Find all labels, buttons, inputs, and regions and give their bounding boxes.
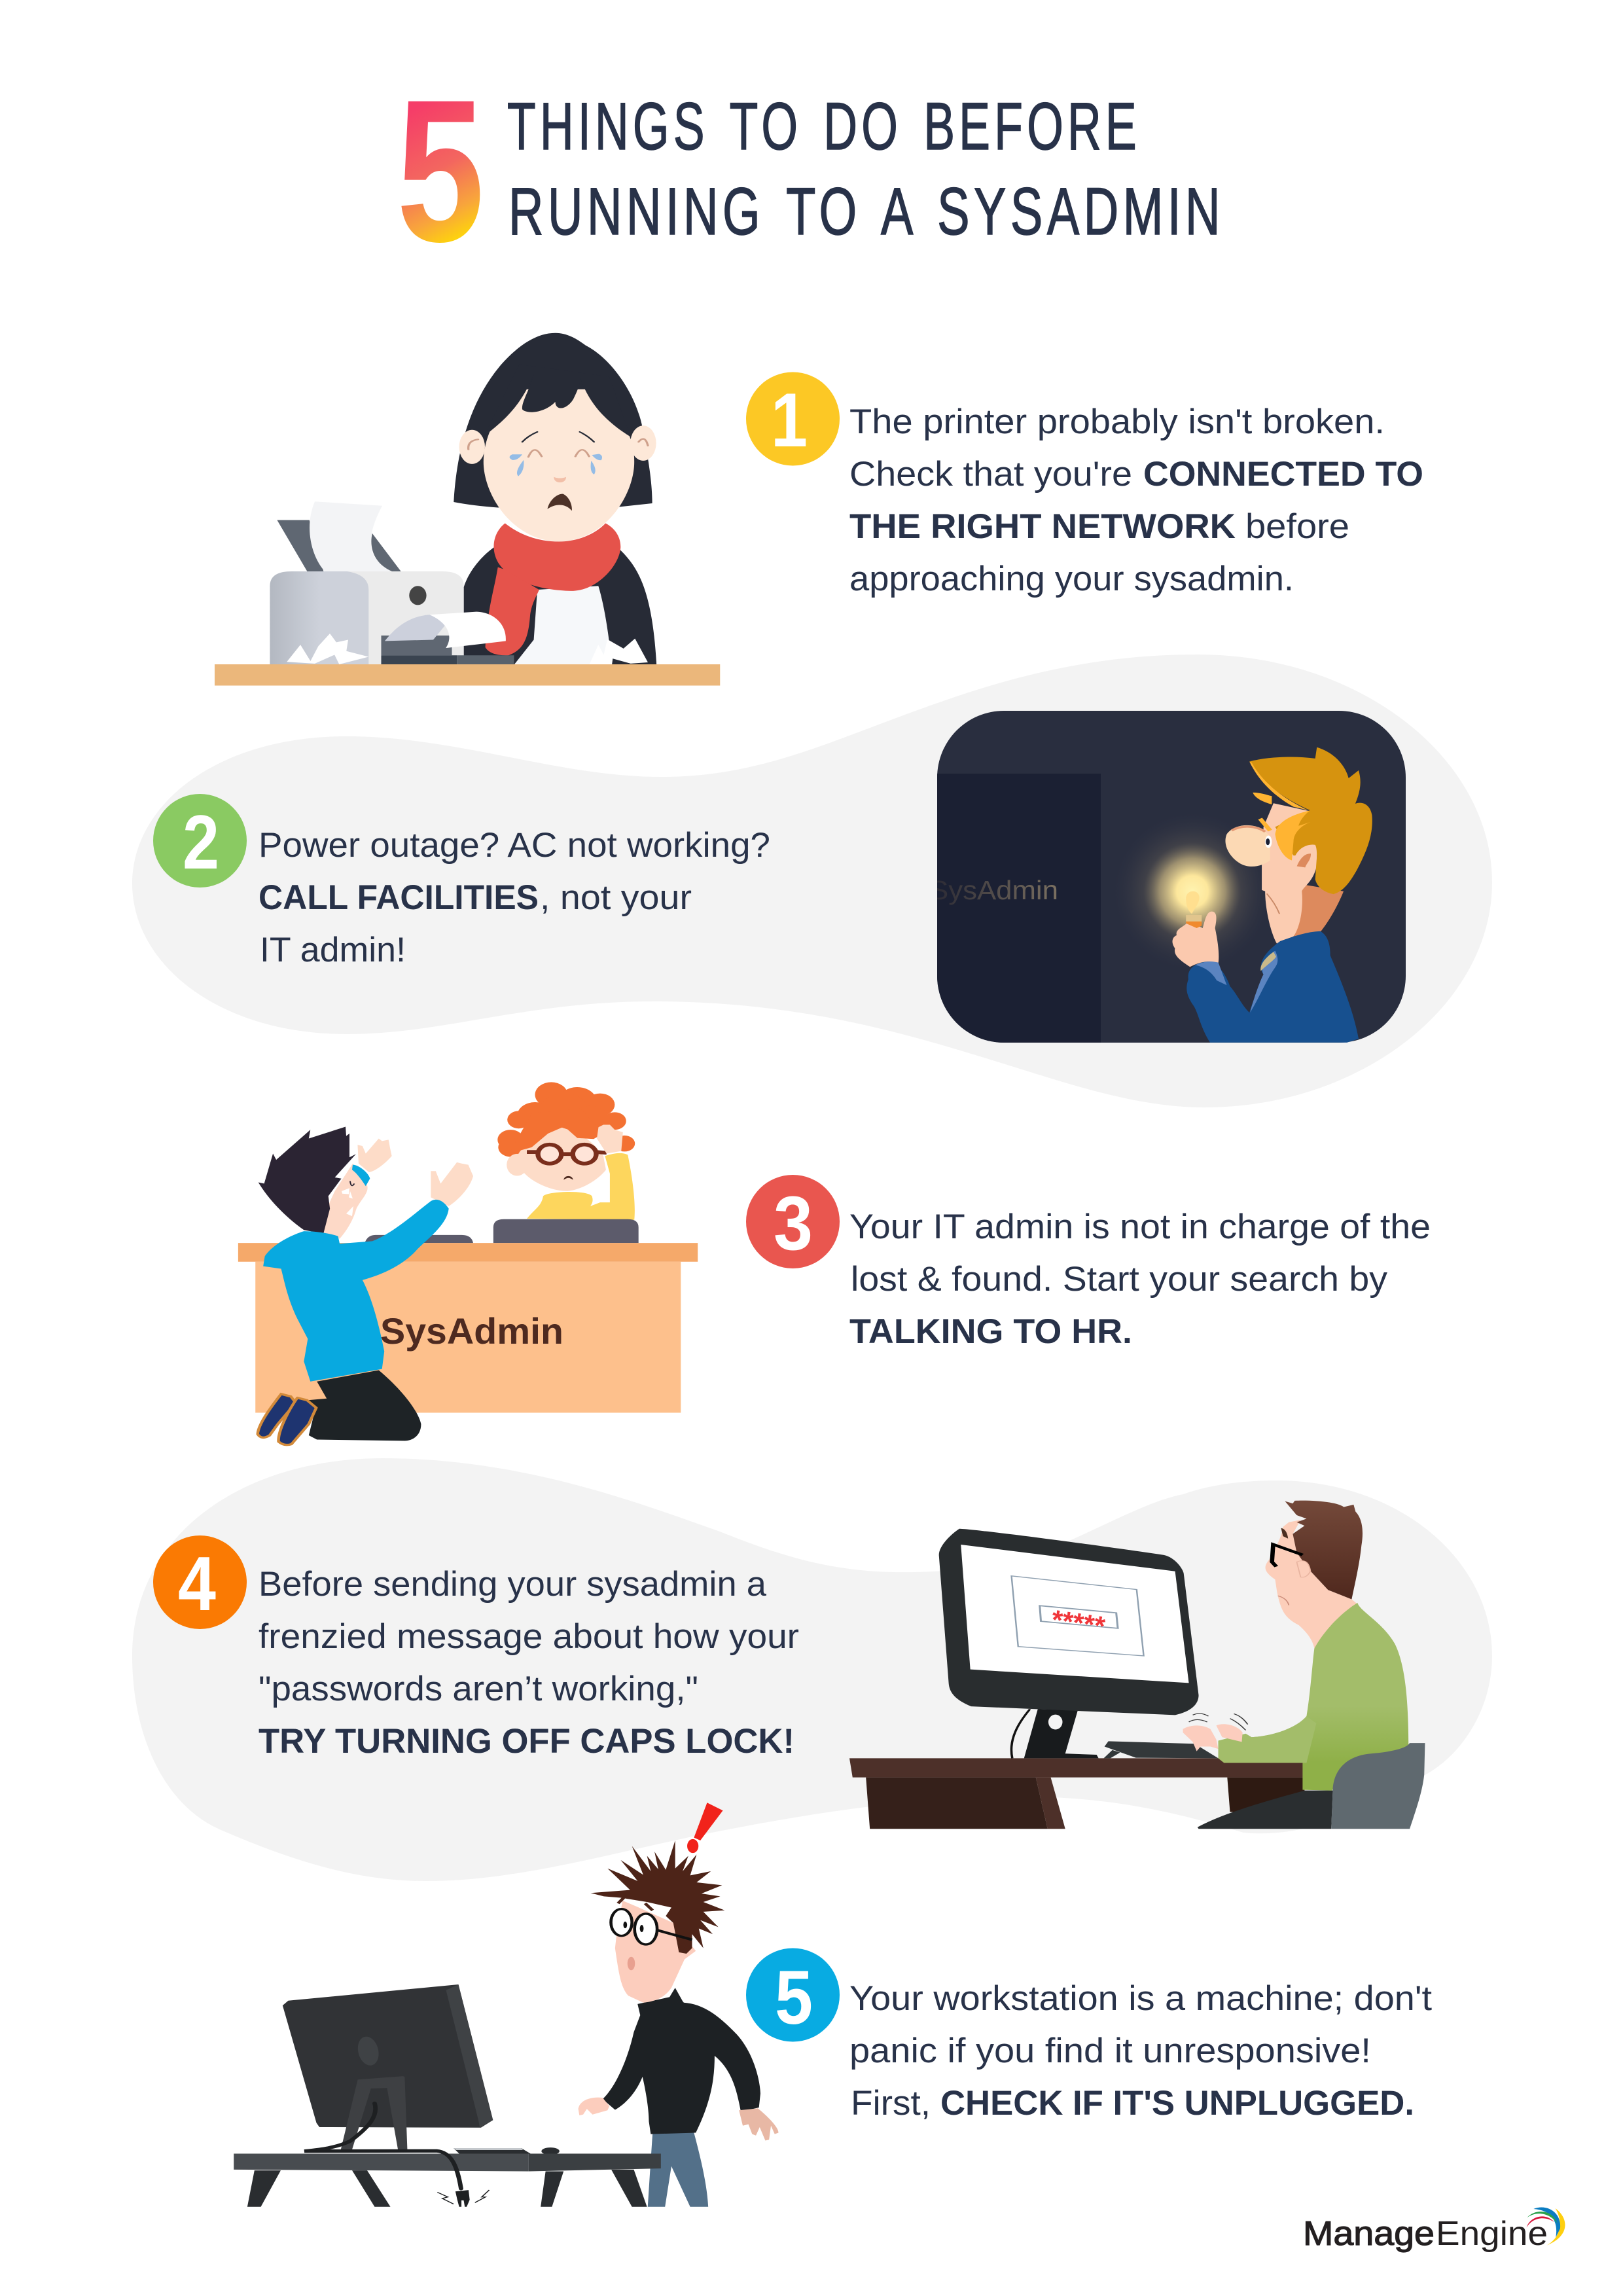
power cable xyxy=(304,2104,461,2189)
ear xyxy=(315,1191,329,1209)
ManageEngine logo xyxy=(1303,2208,1565,2253)
woman body xyxy=(464,547,656,665)
printer slot xyxy=(381,636,452,655)
hair highlights xyxy=(1249,762,1313,860)
printer tray xyxy=(277,520,401,572)
nose and mouth xyxy=(554,477,566,482)
redhead ear xyxy=(507,1154,527,1176)
title numeral 5: 5 xyxy=(397,57,484,284)
redhead sweater xyxy=(527,1153,635,1220)
kneeling man hair xyxy=(259,1127,356,1234)
step 5 text: panic if you find it unresponsive! xyxy=(849,2032,1371,2070)
ear xyxy=(1296,1561,1310,1577)
mouse xyxy=(541,2147,560,2155)
tears xyxy=(510,454,602,476)
left hand xyxy=(579,2098,609,2115)
printer base right xyxy=(457,655,514,665)
step 5 text: First, xyxy=(851,2084,931,2123)
hair xyxy=(1285,1501,1363,1600)
password asterisks: ***** xyxy=(1050,1604,1107,1641)
step 1 text: The printer probably isn't broken. xyxy=(849,403,1385,441)
step 2 badge xyxy=(153,794,247,888)
step 2 text: Power outage? AC not working? xyxy=(259,826,770,865)
table left panel xyxy=(866,1778,1048,1829)
scarf tail xyxy=(486,567,539,655)
table top left xyxy=(234,2154,529,2171)
step 3 badge: 3 xyxy=(774,1180,813,1266)
pupils xyxy=(623,1922,643,1932)
step 4 text: frenzied message about how your xyxy=(259,1617,799,1656)
closed eyes and brows xyxy=(469,432,648,457)
step 2 text: IT admin! xyxy=(260,931,406,969)
step 3 badge xyxy=(746,1175,840,1268)
crumpled paper right xyxy=(590,639,648,664)
hair xyxy=(1249,747,1372,894)
step 5 badge xyxy=(746,1948,840,2042)
exclamation dot xyxy=(687,1839,698,1853)
ear xyxy=(1294,845,1317,886)
lighter top xyxy=(1186,915,1202,922)
sparks xyxy=(437,2190,490,2204)
glasses xyxy=(527,1145,607,1164)
jammed paper inner xyxy=(385,615,448,641)
step 4 badge xyxy=(153,1535,247,1629)
step 2 badge: 2 xyxy=(183,799,219,885)
title xyxy=(397,57,1224,284)
keyboard foot xyxy=(1103,1750,1120,1758)
step 4 text: TRY TURNING OFF CAPS LOCK! xyxy=(259,1722,794,1761)
sweater xyxy=(603,1988,760,2134)
mouth xyxy=(628,1957,635,1970)
title line 2: RUNNING TO A SYSADMIN xyxy=(508,174,1224,249)
glasses xyxy=(1272,1545,1302,1567)
eyebrow xyxy=(1260,819,1270,831)
lighter xyxy=(1186,921,1202,928)
desk xyxy=(215,664,720,686)
hands xyxy=(1183,1724,1243,1751)
sweater xyxy=(1219,1603,1408,1791)
mouth xyxy=(547,494,572,511)
desk top xyxy=(238,1243,698,1262)
mouth crease xyxy=(1267,893,1279,914)
mouth xyxy=(1278,1596,1289,1605)
scarf xyxy=(493,524,620,591)
illustration: kneeling man at sysadmin desk xyxy=(238,1082,698,1445)
pants xyxy=(1198,1791,1333,1829)
redhead mouth xyxy=(563,1176,573,1180)
printer base xyxy=(381,655,457,665)
bangs xyxy=(484,365,631,437)
unplugged plug xyxy=(455,2190,470,2207)
small monitor xyxy=(365,1235,473,1243)
pupil xyxy=(1266,838,1270,845)
spiky hair xyxy=(591,1840,724,1954)
keyboard xyxy=(1105,1741,1219,1758)
eyebrow xyxy=(1281,1528,1288,1539)
printer button xyxy=(409,586,427,605)
glasses xyxy=(611,1909,692,1945)
face xyxy=(1266,1520,1357,1649)
nose xyxy=(1225,825,1270,867)
light glow xyxy=(1114,813,1271,970)
neck xyxy=(1294,884,1344,941)
desk label SysAdmin: SysAdmin xyxy=(380,1310,563,1352)
table top xyxy=(849,1758,1304,1778)
eyebrows xyxy=(618,1898,652,1910)
step 3 text: Your IT admin is not in charge of the xyxy=(849,1208,1431,1246)
door label: SysAdmin xyxy=(929,875,1058,905)
monitor rear xyxy=(283,1984,493,2128)
flame xyxy=(1186,891,1200,914)
illustration: man holding lighter xyxy=(1173,747,1372,1043)
redhead face xyxy=(517,1127,606,1191)
table right panel xyxy=(1227,1778,1304,1812)
face xyxy=(1262,803,1317,944)
step 3 text xyxy=(849,1208,1431,1351)
keyboard top xyxy=(454,2148,523,2150)
step 1 badge xyxy=(746,372,840,466)
ears xyxy=(459,425,656,464)
jammed paper xyxy=(430,612,506,648)
eye xyxy=(350,1181,354,1185)
step 1 text: THE RIGHT NETWORK xyxy=(849,507,1236,546)
illustration: crying woman with broken printer xyxy=(215,333,720,686)
sleeve xyxy=(1219,1716,1316,1763)
step 1 text: approaching your sysadmin. xyxy=(849,560,1294,598)
step 1 badge: 1 xyxy=(771,377,808,463)
face xyxy=(615,1901,696,2003)
hoodie xyxy=(263,1200,449,1382)
exclamation mark xyxy=(694,1803,723,1840)
hand xyxy=(1173,912,1219,967)
panel: background blob for step 2 xyxy=(132,655,1492,1107)
step 2 text xyxy=(259,826,770,969)
illustration: man at computer with caps lock password xyxy=(849,1501,1425,1829)
monitor stand xyxy=(1024,1709,1099,1758)
step 3 text: lost & found. Start your search by xyxy=(851,1260,1388,1299)
logo arcs xyxy=(1527,2208,1565,2246)
nose shading xyxy=(1232,827,1265,832)
kneeling man back hand xyxy=(357,1139,392,1172)
step 4 badge: 4 xyxy=(178,1541,216,1626)
step 4 text xyxy=(259,1565,799,1761)
step 2 text: , not your xyxy=(540,878,692,917)
step 4 text: "passwords aren’t working," xyxy=(259,1670,698,1708)
woman hair xyxy=(454,333,652,507)
login dialog xyxy=(1012,1576,1144,1656)
step 4 text: Before sending your sysadmin a xyxy=(259,1565,767,1604)
eye xyxy=(1265,836,1272,848)
table legs xyxy=(247,2170,647,2207)
illustration: dark room panel with door xyxy=(929,711,1406,1043)
sleeve lit edge xyxy=(1195,961,1226,985)
stand hole xyxy=(1048,1715,1063,1729)
step 2 text: CALL FACILITIES xyxy=(259,878,539,917)
step 5 badge: 5 xyxy=(775,1954,813,2040)
right hand xyxy=(739,2108,779,2140)
title line 1: THINGS TO DO BEFORE xyxy=(507,89,1141,164)
monitor stand xyxy=(341,2076,407,2149)
monitor side xyxy=(446,1984,493,2128)
keyboard xyxy=(454,2148,531,2154)
password field xyxy=(1040,1605,1118,1628)
panel: background blob for step 4 xyxy=(132,1458,1492,1881)
wristband xyxy=(352,1165,370,1186)
logo wordmark xyxy=(1303,2215,1548,2253)
pants xyxy=(307,1370,421,1441)
step 5 text: CHECK IF IT'S UNPLUGGED. xyxy=(940,2084,1414,2123)
large monitor xyxy=(493,1219,639,1243)
step 1 text: before xyxy=(1245,507,1349,546)
logo wordmark: Manage xyxy=(1303,2215,1435,2253)
step 3 text: TALKING TO HR. xyxy=(849,1312,1132,1351)
step 1 text: Check that you're xyxy=(849,455,1132,493)
table strut xyxy=(1036,1778,1065,1829)
redhead bangs xyxy=(509,1109,603,1153)
crumpled paper left xyxy=(287,634,368,664)
typing motion lines xyxy=(1189,1713,1247,1731)
front hand xyxy=(431,1162,473,1206)
logo wordmark: Engine xyxy=(1436,2215,1548,2253)
inner ear xyxy=(1297,853,1311,867)
tears xyxy=(342,1188,353,1216)
screen xyxy=(961,1545,1189,1683)
dark background xyxy=(937,711,1406,1043)
monitor body xyxy=(939,1529,1199,1715)
redhead hair xyxy=(497,1082,635,1157)
illustration: panicked man with unplugged computer xyxy=(234,1803,779,2207)
printer body xyxy=(347,571,464,665)
jacket lit edge xyxy=(1250,951,1277,1013)
step 5 text xyxy=(849,1979,1432,2123)
step 1 text xyxy=(849,403,1423,598)
jeans xyxy=(648,2132,708,2207)
redhead hand xyxy=(597,1124,623,1153)
paper in tray xyxy=(310,501,394,572)
monitor logo xyxy=(355,2036,381,2066)
step 1 text: CONNECTED TO xyxy=(1143,455,1423,493)
door xyxy=(937,774,1101,1043)
kneeling man face xyxy=(320,1164,368,1239)
jacket xyxy=(1186,931,1359,1043)
chair xyxy=(1331,1743,1425,1829)
printer left panel xyxy=(270,571,368,665)
monitor cable xyxy=(1011,1709,1030,1758)
desk body xyxy=(255,1262,681,1413)
shoes xyxy=(258,1394,316,1445)
face xyxy=(484,389,634,541)
shirt xyxy=(514,586,612,665)
jacket highlight xyxy=(1260,952,1276,971)
step 5 text: Your workstation is a machine; don't xyxy=(849,1979,1432,2018)
table top right xyxy=(529,2154,661,2171)
